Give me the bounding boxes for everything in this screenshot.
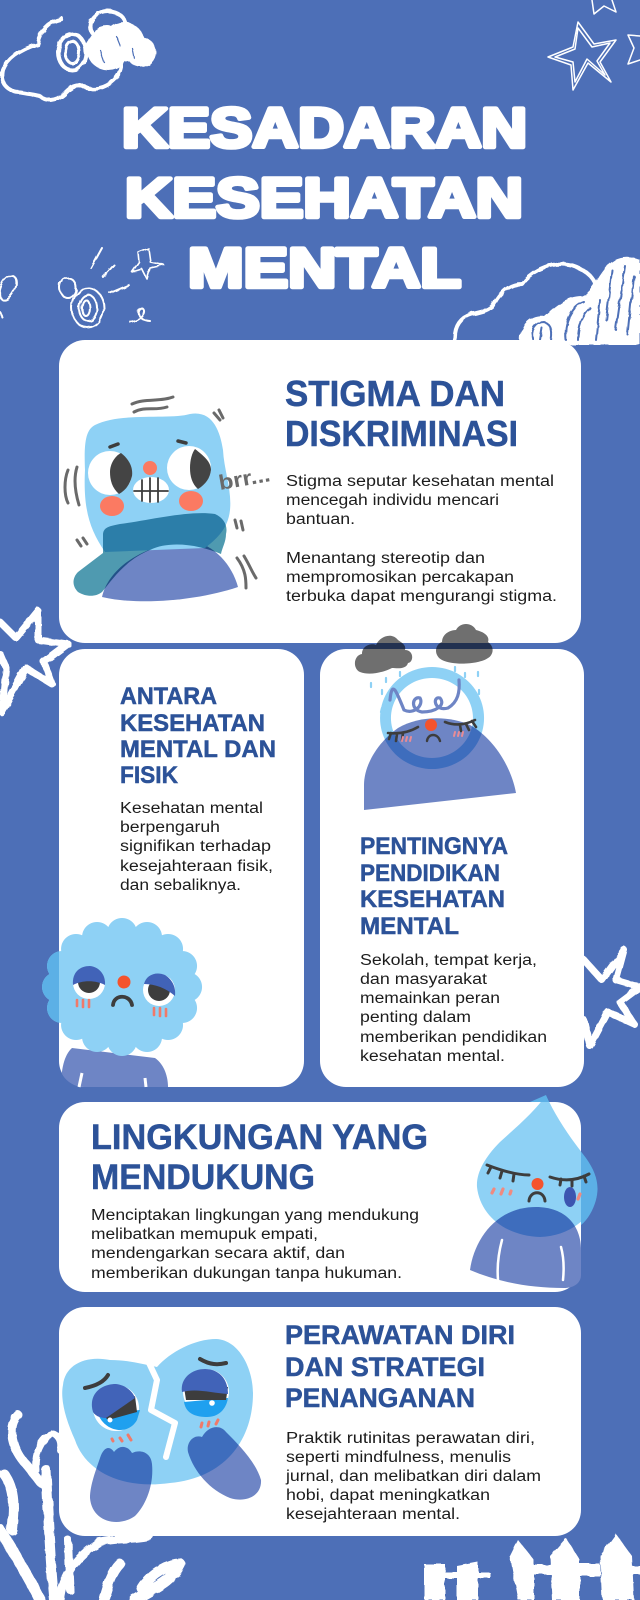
heading: antara kesehatan mental dan fisik: MENTAL DAN (120, 736, 276, 763)
decoration: cloud top left (2, 11, 156, 100)
decoration: cloud top right (455, 257, 640, 345)
text: stigma body: mencegah individu mencari (286, 492, 499, 509)
text: antara body: berpengaruh (120, 819, 220, 836)
text: antara body: kesejahteraan fisik, (120, 858, 273, 875)
text: lingkungan body: melibatkan memupuk empati, (91, 1226, 318, 1243)
text: perawatan diri body: jurnal, dan melibatkan diri dalam (285, 1468, 541, 1485)
illustration: shivering character with scarf: brr... (217, 463, 272, 495)
heading: pentingnya pendidikan: PENTINGNYA (360, 833, 508, 860)
text: stigma body: mempromosikan percakapan (286, 569, 514, 586)
text: antara body (120, 800, 273, 894)
illustration: rain cloud character (355, 624, 516, 810)
decoration: cactus bottom left (0, 1415, 180, 1600)
text: pendidikan body: penting dalam (360, 1009, 471, 1026)
text: stigma body: bantuan. (286, 511, 355, 528)
panel: stigma card background (59, 340, 581, 643)
text: lingkungan body: memberikan dukungan tanpa hukuman. (91, 1265, 402, 1282)
text: perawatan diri body: kesejahteraan mental. (286, 1506, 460, 1523)
title: KESEHATAN (125, 166, 523, 229)
text: perawatan diri body (285, 1430, 541, 1523)
heading: antara kesehatan mental dan fisik: ANTARA (120, 683, 217, 710)
text: lingkungan body: mendengarkan secara aktif, dan (91, 1245, 345, 1262)
text: pendidikan body: kesehatan mental. (360, 1048, 505, 1065)
decoration: fence bottom right (424, 1534, 640, 1600)
panel: perawatan diri card background (59, 1307, 581, 1536)
text: pendidikan body: Sekolah, tempat kerja, (360, 952, 537, 969)
title: MENTAL (188, 236, 461, 299)
text: antara body: Kesehatan mental (120, 800, 263, 817)
heading: perawatan diri: DAN STRATEGI (285, 1352, 485, 1382)
text: lingkungan body: Menciptakan lingkungan yang mendukung (91, 1207, 419, 1224)
illustration: fluffy tired character (42, 918, 202, 1087)
heading: pentingnya pendidikan: MENTAL (360, 913, 459, 940)
text: pendidikan body: memainkan peran (360, 990, 500, 1007)
panel: pendidikan card background (320, 649, 584, 1087)
heading: lingkungan yang mendukung: LINGKUNGAN YANG (91, 1118, 428, 1157)
text: pendidikan body (360, 952, 547, 1065)
text: stigma body: terbuka dapat mengurangi stigma. (286, 588, 557, 605)
panel: lingkungan card background (59, 1102, 581, 1292)
heading: perawatan diri: PENANGANAN (285, 1383, 475, 1413)
text: stigma body (286, 473, 557, 605)
illustration: broken heart character (62, 1339, 261, 1522)
panel: antara kesehatan card background (59, 649, 304, 1087)
heading: pentingnya pendidikan: KESEHATAN (360, 886, 505, 913)
decoration: star right (584, 950, 640, 1046)
heading: pentingnya pendidikan (360, 833, 508, 940)
title (122, 96, 527, 299)
text: pendidikan body: dan masyarakat (360, 971, 488, 988)
heading: antara kesehatan mental dan fisik (120, 683, 276, 789)
text: antara body: signifikan terhadap (120, 838, 271, 855)
text: stigma body: Stigma seputar kesehatan mental (286, 473, 554, 490)
decoration: star left (0, 611, 68, 712)
text: perawatan diri body: hobi, dapat meningkatkan (286, 1487, 490, 1504)
heading: perawatan diri: PERAWATAN DIRI (285, 1320, 515, 1350)
heading: antara kesehatan mental dan fisik: KESEHATAN (120, 710, 265, 737)
text: pendidikan body: memberikan pendidikan (360, 1029, 547, 1046)
heading: antara kesehatan mental dan fisik: FISIK (120, 762, 179, 789)
heading: stigma: STIGMA DAN (285, 373, 505, 414)
text: lingkungan body (91, 1207, 419, 1282)
heading: lingkungan yang mendukung: MENDUKUNG (91, 1158, 315, 1197)
heading: pentingnya pendidikan: PENDIDIKAN (360, 860, 500, 887)
decoration: scribbles left of title (0, 248, 164, 328)
text: stigma body: Menantang stereotip dan (286, 550, 485, 567)
heading: lingkungan yang mendukung (91, 1118, 428, 1197)
text: antara body: dan sebaliknya. (120, 877, 241, 894)
illustration: crying water drop character (470, 1095, 598, 1288)
decoration: outline stars top right (548, 0, 640, 90)
text: perawatan diri body: seperti mindfulness, menulis (286, 1449, 511, 1466)
heading: stigma: DISKRIMINASI (285, 413, 518, 454)
heading: perawatan diri (285, 1320, 515, 1413)
heading: stigma (285, 373, 518, 454)
text: perawatan diri body: Praktik rutinitas perawatan diri, (286, 1430, 535, 1447)
title: KESADARAN (122, 96, 527, 159)
illustration: shivering character with scarf (65, 397, 272, 601)
